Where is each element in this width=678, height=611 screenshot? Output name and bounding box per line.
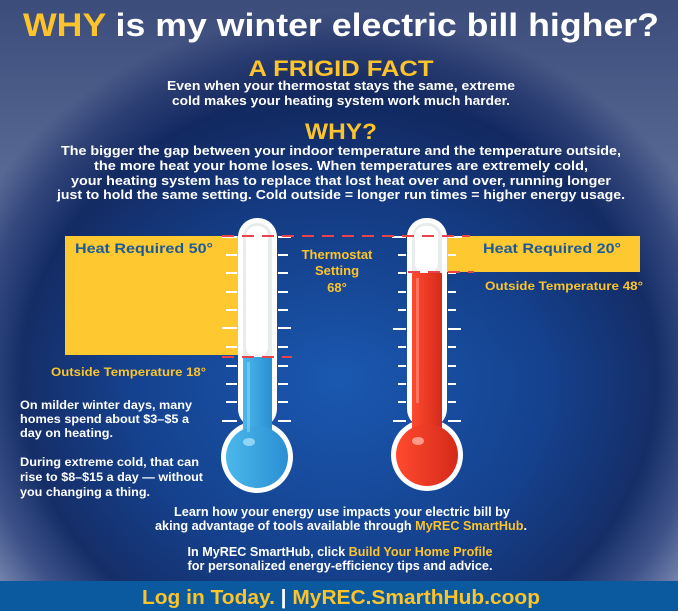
- text block: frigid fact: [167, 78, 515, 108]
- text block: why explanation: The bigger the gap between your indoor temperature and the temperature outside,: [61, 143, 621, 158]
- text block: learn how: aking advantage of tools available through MyREC SmartHub.: [155, 519, 527, 533]
- footer bar: [0, 581, 678, 611]
- text block: learn how: Learn how your energy use impacts your electric bill by: [174, 505, 510, 519]
- label: thermostat setting: Setting: [315, 263, 359, 278]
- dashed line: outside 48: [408, 271, 474, 273]
- dashed line: thermostat setting: [222, 235, 470, 237]
- panel: heat required 20 box: [446, 236, 640, 272]
- panel: heat required 20 box: Heat Required 20°: [483, 240, 621, 256]
- text block: build your home profile: [188, 545, 493, 573]
- text block: frigid fact: Even when your thermostat stays the same, extreme: [167, 78, 515, 93]
- thermometer: warm (right): [391, 218, 463, 491]
- text block: extreme cold cost: [20, 455, 203, 499]
- heading: a frigid fact: A FRIGID FACT: [248, 56, 434, 81]
- label: outside temperature 18: Outside Temperature 18°: [51, 367, 206, 379]
- label: outside temperature 48: Outside Temperature 48°: [485, 281, 643, 293]
- text block: extreme cold cost: you changing a thing.: [20, 485, 150, 499]
- text block: why explanation: just to hold the same setting. Cold outside = longer run times = higher energy usage.: [56, 187, 625, 202]
- text block: learn how: [155, 505, 527, 533]
- text block: mild days cost: day on heating.: [20, 426, 113, 440]
- heading: why: WHY?: [305, 119, 377, 144]
- text block: extreme cold cost: During extreme cold, that can: [20, 455, 199, 469]
- label: thermostat setting: [302, 247, 373, 295]
- dashed line: outside 18: [222, 356, 292, 358]
- text block: extreme cold cost: rise to $8–$15 a day — without: [20, 470, 203, 484]
- text block: build your home profile: for personalized energy-efficiency tips and advice.: [188, 559, 492, 573]
- panel: heat required 50 box: Heat Required 50°: [75, 240, 213, 256]
- text block: mild days cost: On milder winter days, many: [20, 398, 192, 412]
- text block: build your home profile: In MyREC SmartHub, click Build Your Home Profile: [188, 545, 493, 559]
- title: WHY is my winter electric bill higher?: [23, 7, 659, 43]
- text block: why explanation: your heating system has to replace that lost heat over and over, running longer: [71, 173, 611, 188]
- panel: heat required 50 box: [65, 236, 241, 355]
- text block: frigid fact: cold makes your heating system work much harder.: [172, 93, 510, 108]
- text block: why explanation: the more heat your home loses. When temperatures are extremely cold,: [94, 158, 588, 173]
- label: thermostat setting: 68°: [327, 280, 347, 295]
- text block: why explanation: [56, 143, 625, 202]
- thermometer: cold (left): [221, 218, 293, 493]
- text block: mild days cost: homes spend about $3–$5 a: [20, 412, 189, 426]
- text block: mild days cost: [20, 398, 192, 440]
- label: thermostat setting: Thermostat: [302, 247, 373, 262]
- footer bar: Log in Today. | MyREC.SmarthHub.coop: [142, 587, 540, 609]
